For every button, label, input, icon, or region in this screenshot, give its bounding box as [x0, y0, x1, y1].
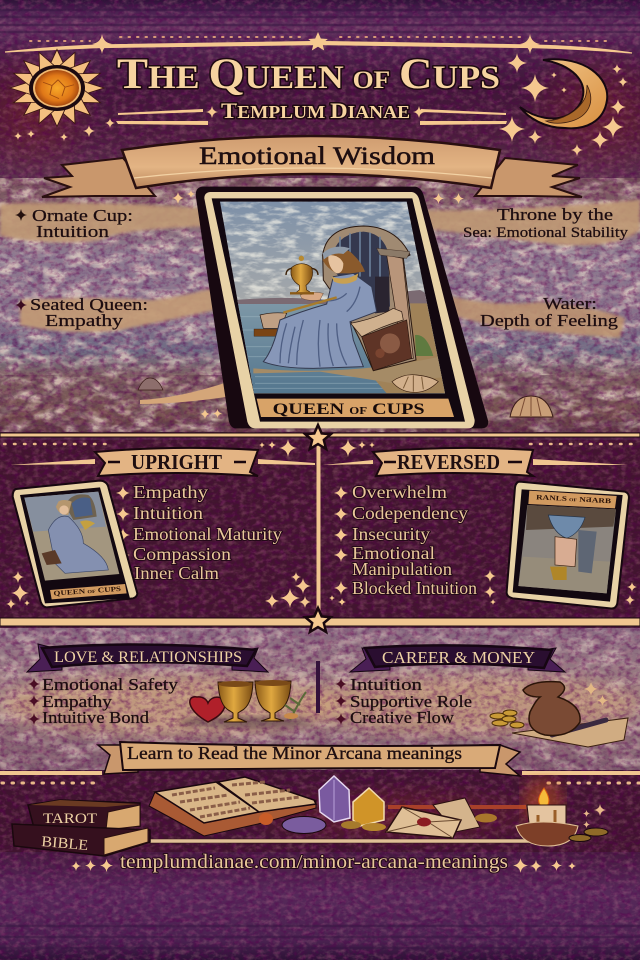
banner: Emotional Wisdom: Emotional Wisdom	[199, 143, 436, 170]
reversed list: Blocked Intuition	[352, 578, 477, 598]
label: Throne by the Sea	[463, 205, 629, 241]
reversed list	[334, 482, 477, 598]
shelf	[150, 805, 530, 843]
icon: heart and two goblets	[180, 680, 310, 728]
upright heading ribbon	[10, 448, 315, 476]
reversed list: Emotional	[352, 543, 435, 563]
upright list: Empathy	[133, 482, 208, 502]
love list: Empathy	[42, 692, 113, 711]
illustration: bottom still life	[12, 776, 608, 856]
icon: crescent moon with stars	[499, 53, 628, 156]
reversed sparkles	[329, 439, 637, 606]
upright sparkles	[6, 439, 311, 609]
love ribbon heading	[27, 644, 268, 672]
upright list: Intuition	[133, 503, 203, 523]
subtitle: Templum Dianae: TEMPLUM DIANAE	[221, 98, 410, 123]
small sparkles by card	[172, 190, 464, 419]
label: Throne by the Sea: Sea: Emotional Stability	[463, 225, 629, 241]
divider: love and career	[316, 661, 320, 713]
banner: learn to read: Learn to Read the Minor Arcana meanings	[127, 743, 462, 763]
book: Tarot: TAROT	[43, 811, 97, 827]
section: upright and reversed frame	[0, 425, 640, 632]
career list: Creative Flow	[350, 708, 455, 727]
label: Ornate Cup	[15, 206, 133, 241]
title: THE QUEEN OF CUPS	[117, 51, 500, 98]
upright heading ribbon: UPRIGHT	[131, 450, 222, 474]
panel: upright	[6, 439, 315, 609]
label: Water	[480, 294, 619, 330]
upright list: Compassion	[133, 544, 231, 564]
small card: reversed: RANLS OF NƋARB	[536, 493, 612, 505]
label: Ornate Cup: Ornate Cup:	[32, 206, 133, 225]
love list	[28, 675, 179, 727]
golden cup	[291, 264, 313, 294]
small card: reversed	[507, 482, 629, 608]
banner: learn to read	[98, 742, 520, 776]
career ribbon heading: CAREER & MONEY	[382, 648, 535, 667]
tarot card: Queen of Cups	[196, 187, 488, 428]
website url: templumdianae.com/minor-arcana-meanings	[120, 851, 508, 873]
small card: upright queen: QUEEN OF CUPS	[53, 585, 121, 598]
reversed list: Insecurity	[352, 524, 430, 544]
shell decorations	[138, 378, 553, 417]
small sparkles under sun	[14, 118, 115, 141]
panel: reversed	[323, 439, 637, 606]
panel: love and relationships	[27, 644, 310, 728]
armrest and footstool	[260, 313, 287, 328]
throne	[323, 226, 416, 371]
label: Seated Queen	[15, 295, 148, 330]
reversed heading ribbon	[323, 448, 628, 476]
label: Throne by the Sea: Throne by the	[497, 205, 613, 224]
label: Water: Water:	[543, 294, 597, 313]
panel: career and money	[335, 645, 628, 747]
career ribbon heading	[350, 645, 565, 672]
card caption	[257, 399, 454, 418]
open book	[149, 777, 316, 836]
upright list	[116, 482, 282, 583]
subtitle: Templum Dianae	[116, 98, 507, 125]
small card: upright queen	[13, 481, 137, 607]
card scene	[220, 202, 447, 394]
candle in dish	[516, 778, 608, 846]
career list	[335, 675, 472, 727]
career list: Supportive Role	[350, 692, 472, 711]
bottom rule	[0, 771, 640, 783]
ribbons behind labels	[0, 200, 640, 404]
card caption: QUEEN OF CUPS	[273, 401, 425, 418]
top star rule	[5, 32, 632, 54]
love ribbon heading: LOVE & RELATIONSHIPS	[54, 649, 242, 666]
reversed list: Overwhelm	[352, 482, 447, 502]
love list: Intuitive Bond	[42, 708, 150, 727]
label: Seated Queen: Seated Queen:	[30, 295, 148, 314]
label: Water: Depth of Feeling	[480, 311, 619, 330]
upright list: Inner Calm	[134, 563, 219, 583]
crystals and stone	[282, 776, 386, 834]
shell on shore	[392, 375, 438, 392]
label: Seated Queen: Empathy	[45, 311, 124, 330]
reversed heading ribbon: REVERSED	[397, 450, 500, 474]
envelope and letter	[386, 798, 497, 838]
queen	[263, 273, 377, 368]
label: Ornate Cup: Intuition	[36, 222, 110, 241]
reversed list: Codependency	[352, 503, 468, 523]
reversed list: Manipulation	[352, 559, 452, 579]
love list: Emotional Safety	[42, 675, 179, 694]
upright list: Emotional Maturity	[133, 524, 282, 544]
icon: money pouch, coins and quill	[490, 682, 628, 747]
book: Bible: BIBLE	[41, 834, 89, 854]
icon: sun	[10, 49, 104, 127]
career list: Intuition	[350, 675, 423, 694]
book: Bible	[12, 824, 150, 856]
book: Tarot	[28, 800, 140, 832]
banner: Emotional Wisdom	[42, 136, 582, 197]
